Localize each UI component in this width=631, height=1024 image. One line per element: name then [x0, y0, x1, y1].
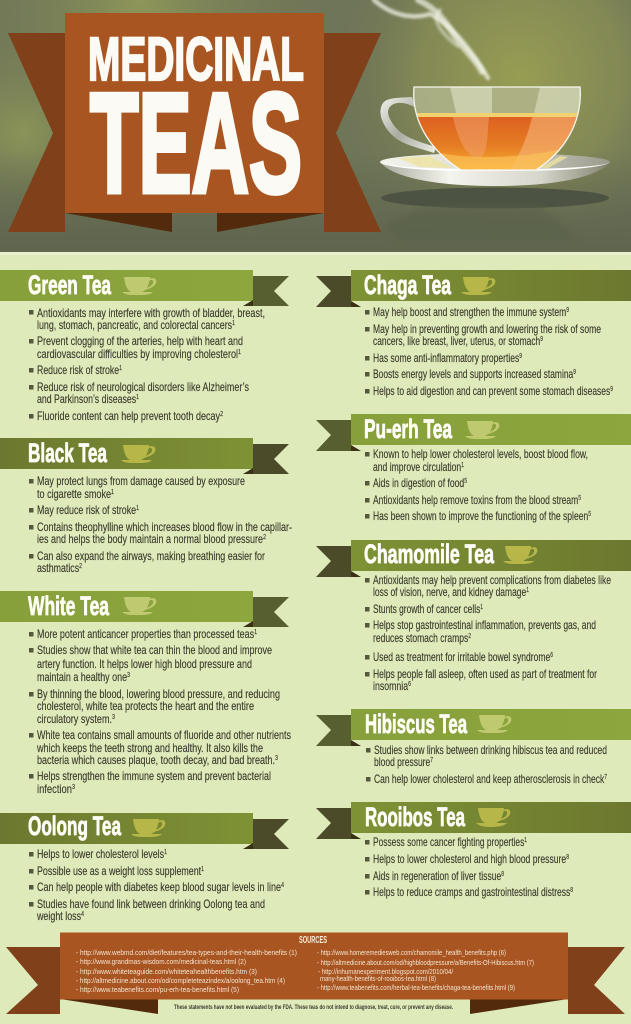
bullet list: black tea: 2: [79, 563, 82, 570]
bullet list: rooibos tea: [365, 835, 573, 899]
source links: right column: [317, 948, 534, 992]
bullet list: pu-erh tea: 5: [578, 495, 581, 502]
panel: rooibos tea: [316, 802, 631, 899]
icon: cup: [465, 421, 499, 439]
bullet list: chamomile tea: 2: [468, 633, 471, 640]
source links: right column: - http://www.homeremediesweb.com/chamomile_health_benefits.php (6): [317, 948, 506, 957]
bullet list: black tea: May protect lungs from damage caused by exposure: [37, 474, 245, 488]
disclaimer: These statements have not been evaluated by the FDA. These teas do not intend to diagnose, treat, cure, or prevent any disease.: [174, 1004, 453, 1011]
bullet list: chaga tea: 9: [540, 336, 543, 343]
bullet list: green tea: lung, stomach, pancreatic, and colorectal cancers: [37, 318, 300, 332]
bullet list: white tea: By thinning the blood, lowering blood pressure, and reducing: [37, 687, 280, 701]
bullet list: white tea: infection: [37, 782, 82, 796]
bullet list: oolong tea: Can help people with diabetes keep blood sugar levels in line: [37, 880, 362, 894]
panel: green tea: [0, 270, 289, 423]
bullet list: rooibos tea: 8: [570, 887, 573, 894]
bullet list: white tea: White tea contains small amounts of fluoride and other nutrients: [37, 728, 291, 742]
header background: [0, 0, 631, 252]
bullet list: white tea: 3: [112, 714, 115, 721]
bullet list: green tea: cardiovascular difficulties by improving cholesterol: [37, 347, 303, 361]
bullet list: green tea: 1: [238, 349, 241, 356]
bullet list: oolong tea: 4: [281, 882, 284, 889]
bullet list: white tea: Studies show that white tea can thin the blood and improve: [37, 643, 272, 657]
bullet list: green tea: Reduce risk of stroke: [37, 363, 150, 377]
bullet list: white tea: 3: [72, 784, 75, 791]
panel: black tea: [0, 438, 292, 575]
bullet list: oolong tea: [29, 847, 284, 923]
bullet list: oolong tea: 1: [164, 849, 167, 856]
bullet list: oolong tea: weight loss: [37, 909, 96, 923]
heading banner: rooibos tea: Rooibos Tea: [365, 802, 465, 832]
bullet list: chamomile tea: 1: [526, 587, 529, 594]
bullet list: hibiscus tea: [366, 743, 607, 786]
band under header: [0, 252, 631, 255]
heading banner: chamomile tea: Chamomile Tea: [364, 539, 494, 569]
bullet list: green tea: Reduce risk of neurological disorders like Alzheimer’s: [37, 380, 249, 394]
shadow: [381, 188, 609, 208]
bullet list: green tea: 1: [232, 320, 235, 327]
source links: left column: - http://altmedicine.about.com/od/completeteazindex/a/oolong_tea.htm (4): [76, 976, 285, 985]
bullet list: pu-erh tea: and improve circulation: [373, 460, 496, 474]
source links: right column: many-health-benefits-of-rooibos-tea.html (8): [320, 974, 436, 983]
bullet list: green tea: 1: [136, 394, 139, 401]
heading banner: pu-erh tea: Pu-erh Tea: [364, 414, 452, 444]
bullet list: rooibos tea: 8: [566, 854, 569, 861]
bullet list: black tea: May reduce risk of stroke: [37, 503, 171, 517]
heading banner: white tea: White Tea: [28, 591, 109, 621]
title: MEDICINAL: [88, 25, 304, 93]
bullet list: white tea: 1: [254, 629, 257, 636]
heading banner: chamomile tea: [316, 539, 631, 577]
bullet list: chaga tea: 9: [610, 386, 613, 393]
panel: pu-erh tea: [316, 414, 631, 523]
bullet list: black tea: Contains theophylline which increases blood flow in the capillar-: [37, 520, 292, 534]
source links: right column: - http://inhumanexperiment.blogspot.com/2010/04/: [318, 967, 453, 976]
bullet list: black tea: 2: [263, 534, 266, 541]
bullet list: black tea: to cigarette smoke: [37, 487, 135, 501]
heading banner: chaga tea: [316, 270, 631, 307]
bullet list: chaga tea: 9: [519, 353, 522, 360]
source links: left column: [76, 948, 297, 994]
bullet list: white tea: cholesterol, white tea protects the heart and the entire: [37, 699, 254, 713]
heading banner: chaga tea: Chaga Tea: [364, 270, 451, 300]
bullet list: green tea: 1: [119, 365, 122, 372]
bullet list: chamomile tea: reduces stomach cramps: [373, 631, 507, 645]
heading banner: hibiscus tea: Hibiscus Tea: [365, 709, 467, 739]
panel: hibiscus tea: [316, 709, 631, 786]
bullet list: white tea: which keeps the teeth strong and healthy. It also kills the: [36, 741, 263, 755]
bullet list: pu-erh tea: 5: [464, 478, 467, 485]
bullet list: oolong tea: 1: [201, 866, 204, 873]
title: TEAS: [90, 64, 302, 223]
bullet list: rooibos tea: Aids in regeneration of liver tissue: [373, 869, 553, 883]
bullet list: white tea: bacteria which causes plaque, tooth decay, and bad breath.: [37, 753, 353, 767]
bullet list: chaga tea: 9: [566, 307, 569, 314]
icon: steam: [374, 0, 488, 78]
heading banner: white tea: [0, 591, 289, 627]
heading banner: black tea: [0, 438, 289, 474]
bullet list: green tea: Fluoride content can help prevent tooth decay: [37, 409, 280, 423]
icon: cup: [131, 819, 165, 837]
bullet list: oolong tea: Studies have found link between drinking Oolong tea and: [37, 897, 265, 911]
bullet list: chamomile tea: [365, 573, 611, 693]
heading banner: black tea: Black Tea: [28, 438, 107, 468]
bullet list: chaga tea: 9: [573, 369, 576, 376]
bullet list: rooibos tea: 8: [501, 871, 504, 878]
bullet list: white tea: circulatory system.: [37, 712, 136, 726]
bullet list: green tea: [29, 306, 265, 423]
bullet list: chaga tea: Has some anti-inflammatory properties: [373, 351, 579, 365]
bullet list: pu-erh tea: 5: [588, 511, 591, 518]
heading banner: green tea: Green Tea: [28, 270, 111, 300]
bullet list: chaga tea: [365, 305, 613, 398]
heading banner: green tea: [0, 270, 289, 306]
bullet list: chamomile tea: insomnia: [373, 679, 421, 693]
source links: right column: - http://altmedicine.about.com/od/highbloodpressure/a/Benefits-Of-Hibiscus.htm (7): [317, 958, 534, 967]
saucer: [381, 163, 609, 186]
title ribbon: [8, 13, 381, 232]
heading banner: pu-erh tea: [316, 414, 631, 451]
bullet list: green tea: Antioxidants may interfere with growth of bladder, breast,: [37, 306, 265, 320]
bullet list: black tea: 1: [136, 505, 139, 512]
panel: white tea: [0, 591, 291, 796]
title: [88, 25, 304, 223]
heading banner: rooibos tea: [316, 802, 631, 839]
icon: cup: [503, 546, 537, 564]
bullet list: white tea: maintain a healthy one: [37, 670, 158, 684]
bullet list: chaga tea: cancers, like breast, liver, uterus, or stomach: [373, 334, 610, 348]
tea: [418, 117, 576, 170]
icon: cup: [122, 597, 156, 615]
bullet list: oolong tea: Possible use as a weight loss supplement: [37, 864, 259, 878]
bullet list: chamomile tea: 6: [408, 681, 411, 688]
icon: cup: [476, 808, 510, 827]
bullet list: chamomile tea: Stunts growth of cancer cells: [373, 602, 526, 616]
bullet list: white tea: More potent anticancer properties than processed teas: [37, 627, 328, 641]
icon: cup: [477, 715, 511, 733]
rim outline: [414, 87, 580, 170]
bullet list: chamomile tea: Used as treatment for irritable bowel syndrome: [373, 650, 622, 664]
bullet list: oolong tea: 4: [81, 911, 84, 918]
icon: cup: [122, 277, 156, 295]
panel: chaga tea: [316, 270, 631, 398]
heading banner: oolong tea: Oolong Tea: [28, 811, 121, 841]
bullet list: hibiscus tea: blood pressure: [374, 755, 453, 769]
bullet list: black tea: ies and helps the body maintain a normal blood pressure: [37, 532, 339, 546]
bullet list: white tea: Helps strengthen the immune system and prevent bacterial: [37, 769, 271, 783]
glass: [410, 87, 585, 172]
sources ribbon: [6, 932, 625, 1014]
source links: left column: - http://www.whiteteaguide.com/whiteteahealthbenefits.htm (3): [76, 967, 257, 976]
bullet list: hibiscus tea: 7: [430, 757, 433, 764]
bullet list: chamomile tea: loss of vision, nerve, and kidney damage: [373, 585, 590, 599]
heading banner: oolong tea: [0, 811, 289, 849]
bullet list: green tea: and Parkinson’s diseases: [37, 392, 173, 406]
panel: sources: [6, 932, 625, 1014]
bullet list: white tea: 3: [275, 755, 278, 762]
bullet list: green tea: 2: [220, 411, 223, 418]
bullet list: black tea: 1: [111, 489, 114, 496]
source links: left column: - http://www.webmd.com/diet/features/tea-types-and-their-health-benefits (1): [76, 948, 297, 957]
panel: oolong tea: [0, 811, 289, 923]
bullet list: pu-erh tea: [365, 447, 591, 523]
header panel: [0, 0, 631, 252]
bullet list: black tea: asthmatics: [37, 561, 94, 575]
source links: left column: - http://www.teabenefits.com/pu-erh-tea-benefits.html (5): [76, 985, 239, 994]
handle: [380, 97, 436, 153]
bullet list: pu-erh tea: Aids in digestion of food: [373, 476, 500, 490]
bullet list: green tea: Prevent clogging of the arteries, help with heart and: [37, 334, 243, 348]
bullet list: pu-erh tea: 1: [461, 462, 464, 469]
sources heading: SOURCES: [299, 935, 327, 946]
bullet list: oolong tea: Helps to lower cholesterol levels: [37, 847, 208, 861]
heading banner: hibiscus tea: [316, 709, 631, 746]
bullet list: white tea: artery function. It helps lower high blood pressure and: [37, 657, 252, 671]
icon: teacup and saucer: [380, 86, 610, 218]
bullet list: hibiscus tea: 7: [604, 774, 607, 781]
bullet list: black tea: Can also expand the airways, making breathing easier for: [37, 549, 265, 563]
panel: chamomile tea: [316, 539, 631, 693]
bullet list: white tea: 3: [127, 672, 130, 679]
bullet list: chamomile tea: 1: [480, 604, 483, 611]
bullet list: rooibos tea: Possess some cancer fighting properties: [373, 835, 589, 849]
source links: left column: - http://www.grandmas-wisdom.com/medicinal-teas.html (2): [76, 957, 246, 966]
icon: cup: [461, 277, 495, 295]
bullet list: black tea: [29, 474, 292, 575]
bullet list: white tea: [29, 627, 291, 796]
bullet list: chamomile tea: 6: [550, 652, 553, 659]
icon: cup: [121, 445, 155, 463]
bullet list: rooibos tea: 1: [524, 837, 527, 844]
source links: right column: - http://www.teabenefits.com/herbal-tea-benefits/chaga-tea-benefits.html (9): [317, 983, 515, 992]
